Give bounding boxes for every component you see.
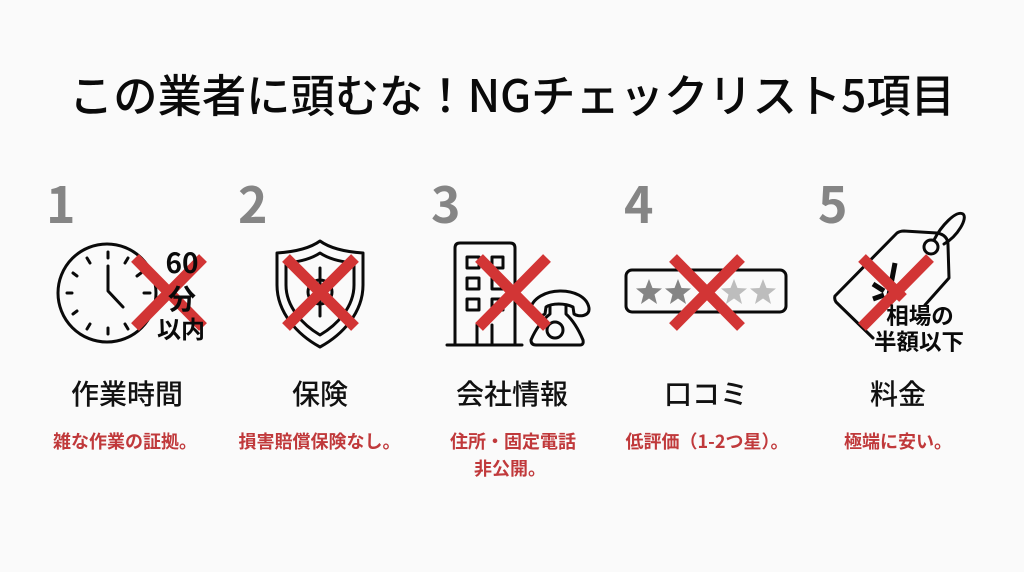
icon: star rating with red cross	[626, 258, 786, 327]
description: 雑な作業の証拠。	[53, 428, 197, 454]
panel: item 2 insurance	[238, 166, 400, 454]
panel: item 5 price	[818, 166, 964, 454]
number 1: 1	[46, 166, 76, 238]
heading: 口コミ	[664, 373, 748, 413]
number 4: 4	[624, 166, 654, 238]
panel: item 4 reviews	[624, 166, 788, 454]
icon: clock with red cross	[58, 244, 203, 342]
icon text: half of market price: 半額以下	[874, 325, 964, 357]
description: 住所・固定電話	[450, 428, 576, 454]
description: 極端に安い。	[844, 428, 952, 454]
heading: 保険	[292, 373, 348, 413]
icon text: within 60 minutes: 分	[168, 278, 196, 318]
icon text: within 60 minutes: 以内	[157, 310, 205, 345]
number 2: 2	[238, 166, 268, 238]
icon: price tag with red cross	[835, 213, 964, 338]
title: この業者に頭むな！NGチェックリスト5項目	[69, 60, 955, 125]
icon text: half of market price	[874, 299, 964, 357]
panel: item 1 work time	[46, 166, 205, 454]
number 3: 3	[431, 166, 460, 238]
heading: 料金	[870, 373, 926, 413]
icon text: half of market price: 相場の	[886, 299, 954, 331]
description line 2: 非公開。	[474, 455, 546, 481]
number 5: 5	[818, 166, 848, 238]
heading: 作業時間	[71, 373, 183, 413]
icon text: within 60 minutes	[157, 242, 205, 345]
description: 低評価（1-2つ星）。	[626, 428, 788, 454]
heading: 会社情報	[456, 373, 568, 413]
description: 損害賠償保険なし。	[238, 428, 400, 454]
icon: shield with red cross	[277, 241, 363, 347]
icon: building and telephone with red cross	[447, 243, 589, 345]
icon text: within 60 minutes: 60	[165, 242, 199, 282]
panel: item 3 company info	[431, 166, 589, 481]
